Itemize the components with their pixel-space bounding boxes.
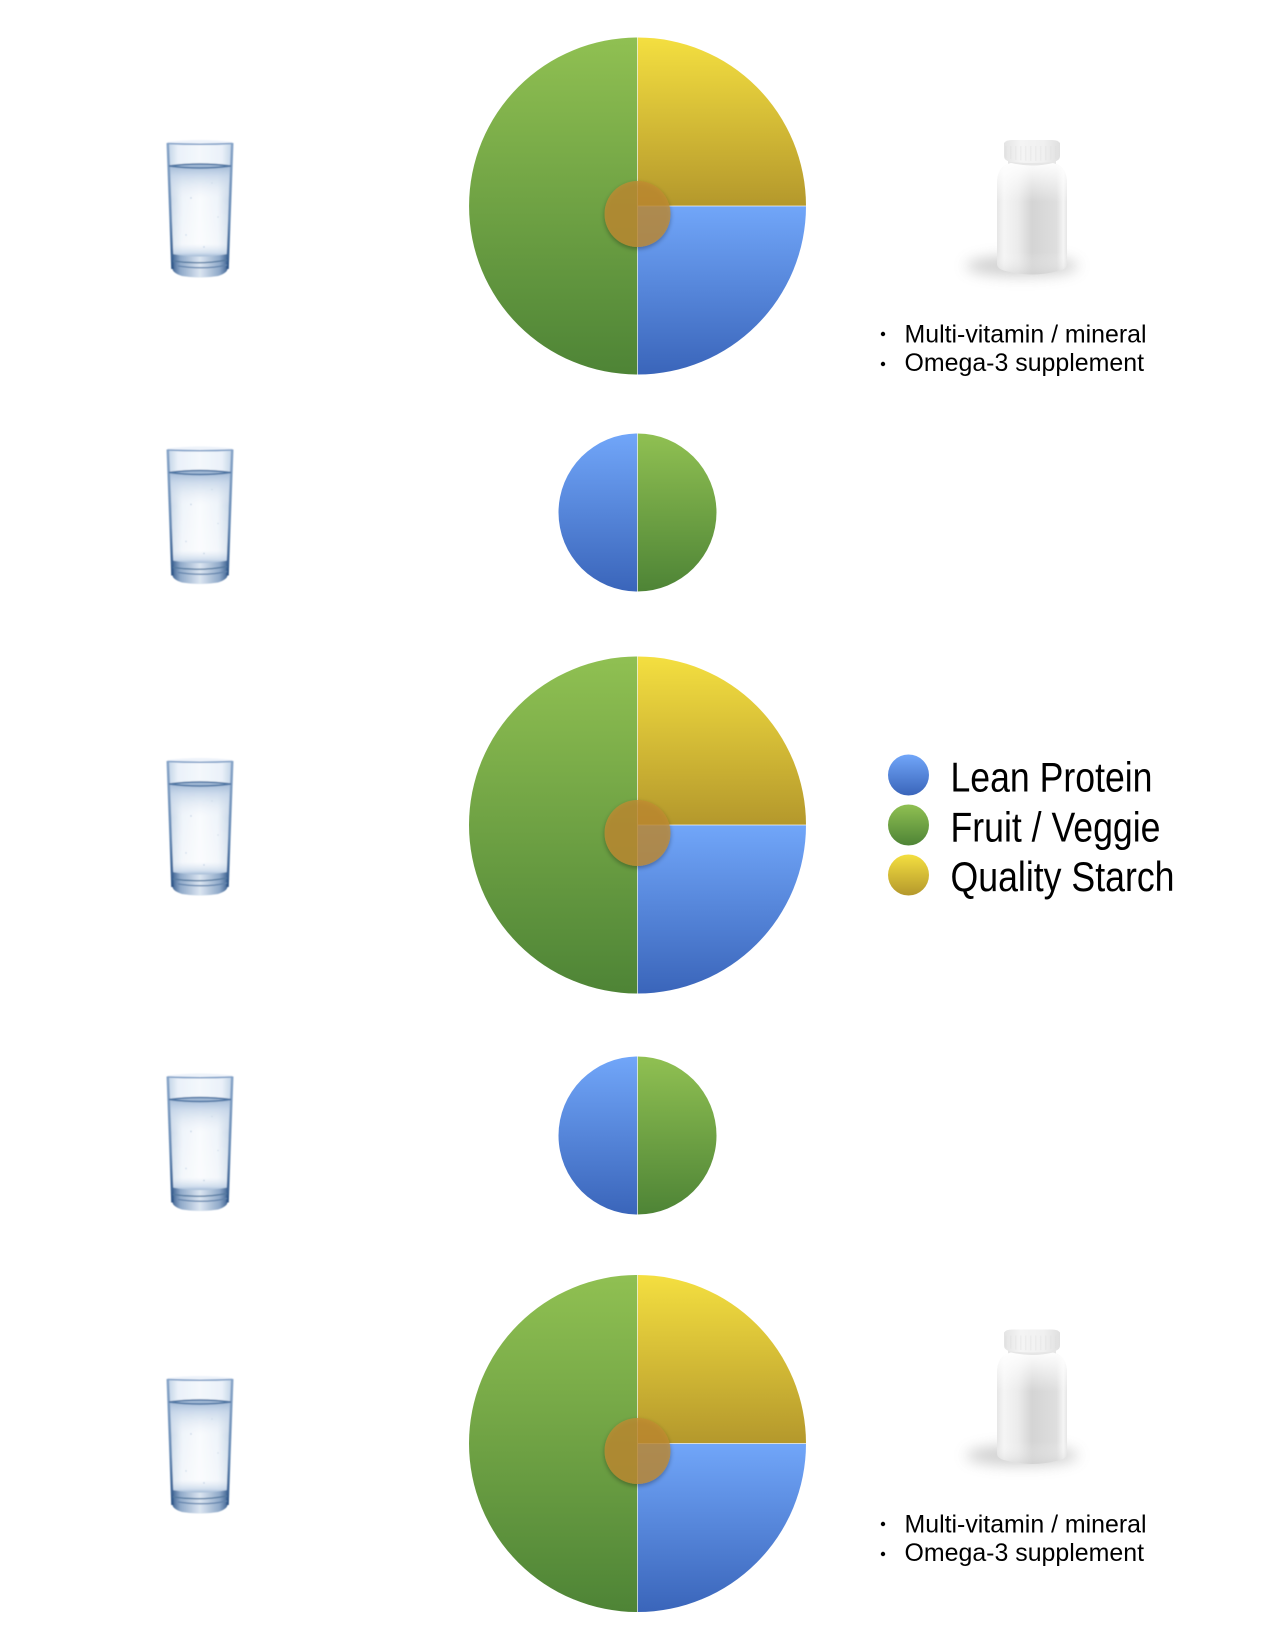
plate chart: meal 1 [469, 38, 806, 374]
icon: water glass 4 [168, 1074, 232, 1211]
legend item: quality starch: Quality Starch [950, 853, 1174, 900]
text block: supplements 1: Multi-vitamin / mineral [904, 320, 1146, 348]
legend item: fruit and veggie [888, 804, 1160, 850]
legend item: quality starch [888, 853, 1174, 900]
legend item: lean protein [888, 754, 1152, 800]
icon: water glass 5 [168, 1376, 232, 1514]
legend item: fruit and veggie: Fruit / Veggie [950, 804, 1160, 850]
icon: water glass 1 [168, 140, 232, 278]
plate chart: snack 1 [558, 434, 716, 592]
icon: water glass 3 [168, 758, 232, 896]
legend [888, 754, 1174, 900]
legend item: lean protein: Lean Protein [950, 754, 1152, 800]
text block: supplements 1: Omega-3 supplement [904, 349, 1144, 377]
plate chart: meal 3 [469, 1275, 806, 1612]
text block: supplements 2: Multi-vitamin / mineral [904, 1510, 1146, 1538]
text block: supplements 2 [881, 1510, 1146, 1567]
plate chart: snack 2 [558, 1056, 716, 1214]
icon: supplement bottle 2 [966, 1330, 1078, 1466]
plate chart: meal 2 [469, 656, 806, 994]
text block: supplements 2: Omega-3 supplement [904, 1539, 1144, 1567]
icon: supplement bottle 1 [966, 140, 1078, 276]
text block: supplements 1 [881, 320, 1146, 377]
icon: water glass 2 [168, 446, 232, 584]
